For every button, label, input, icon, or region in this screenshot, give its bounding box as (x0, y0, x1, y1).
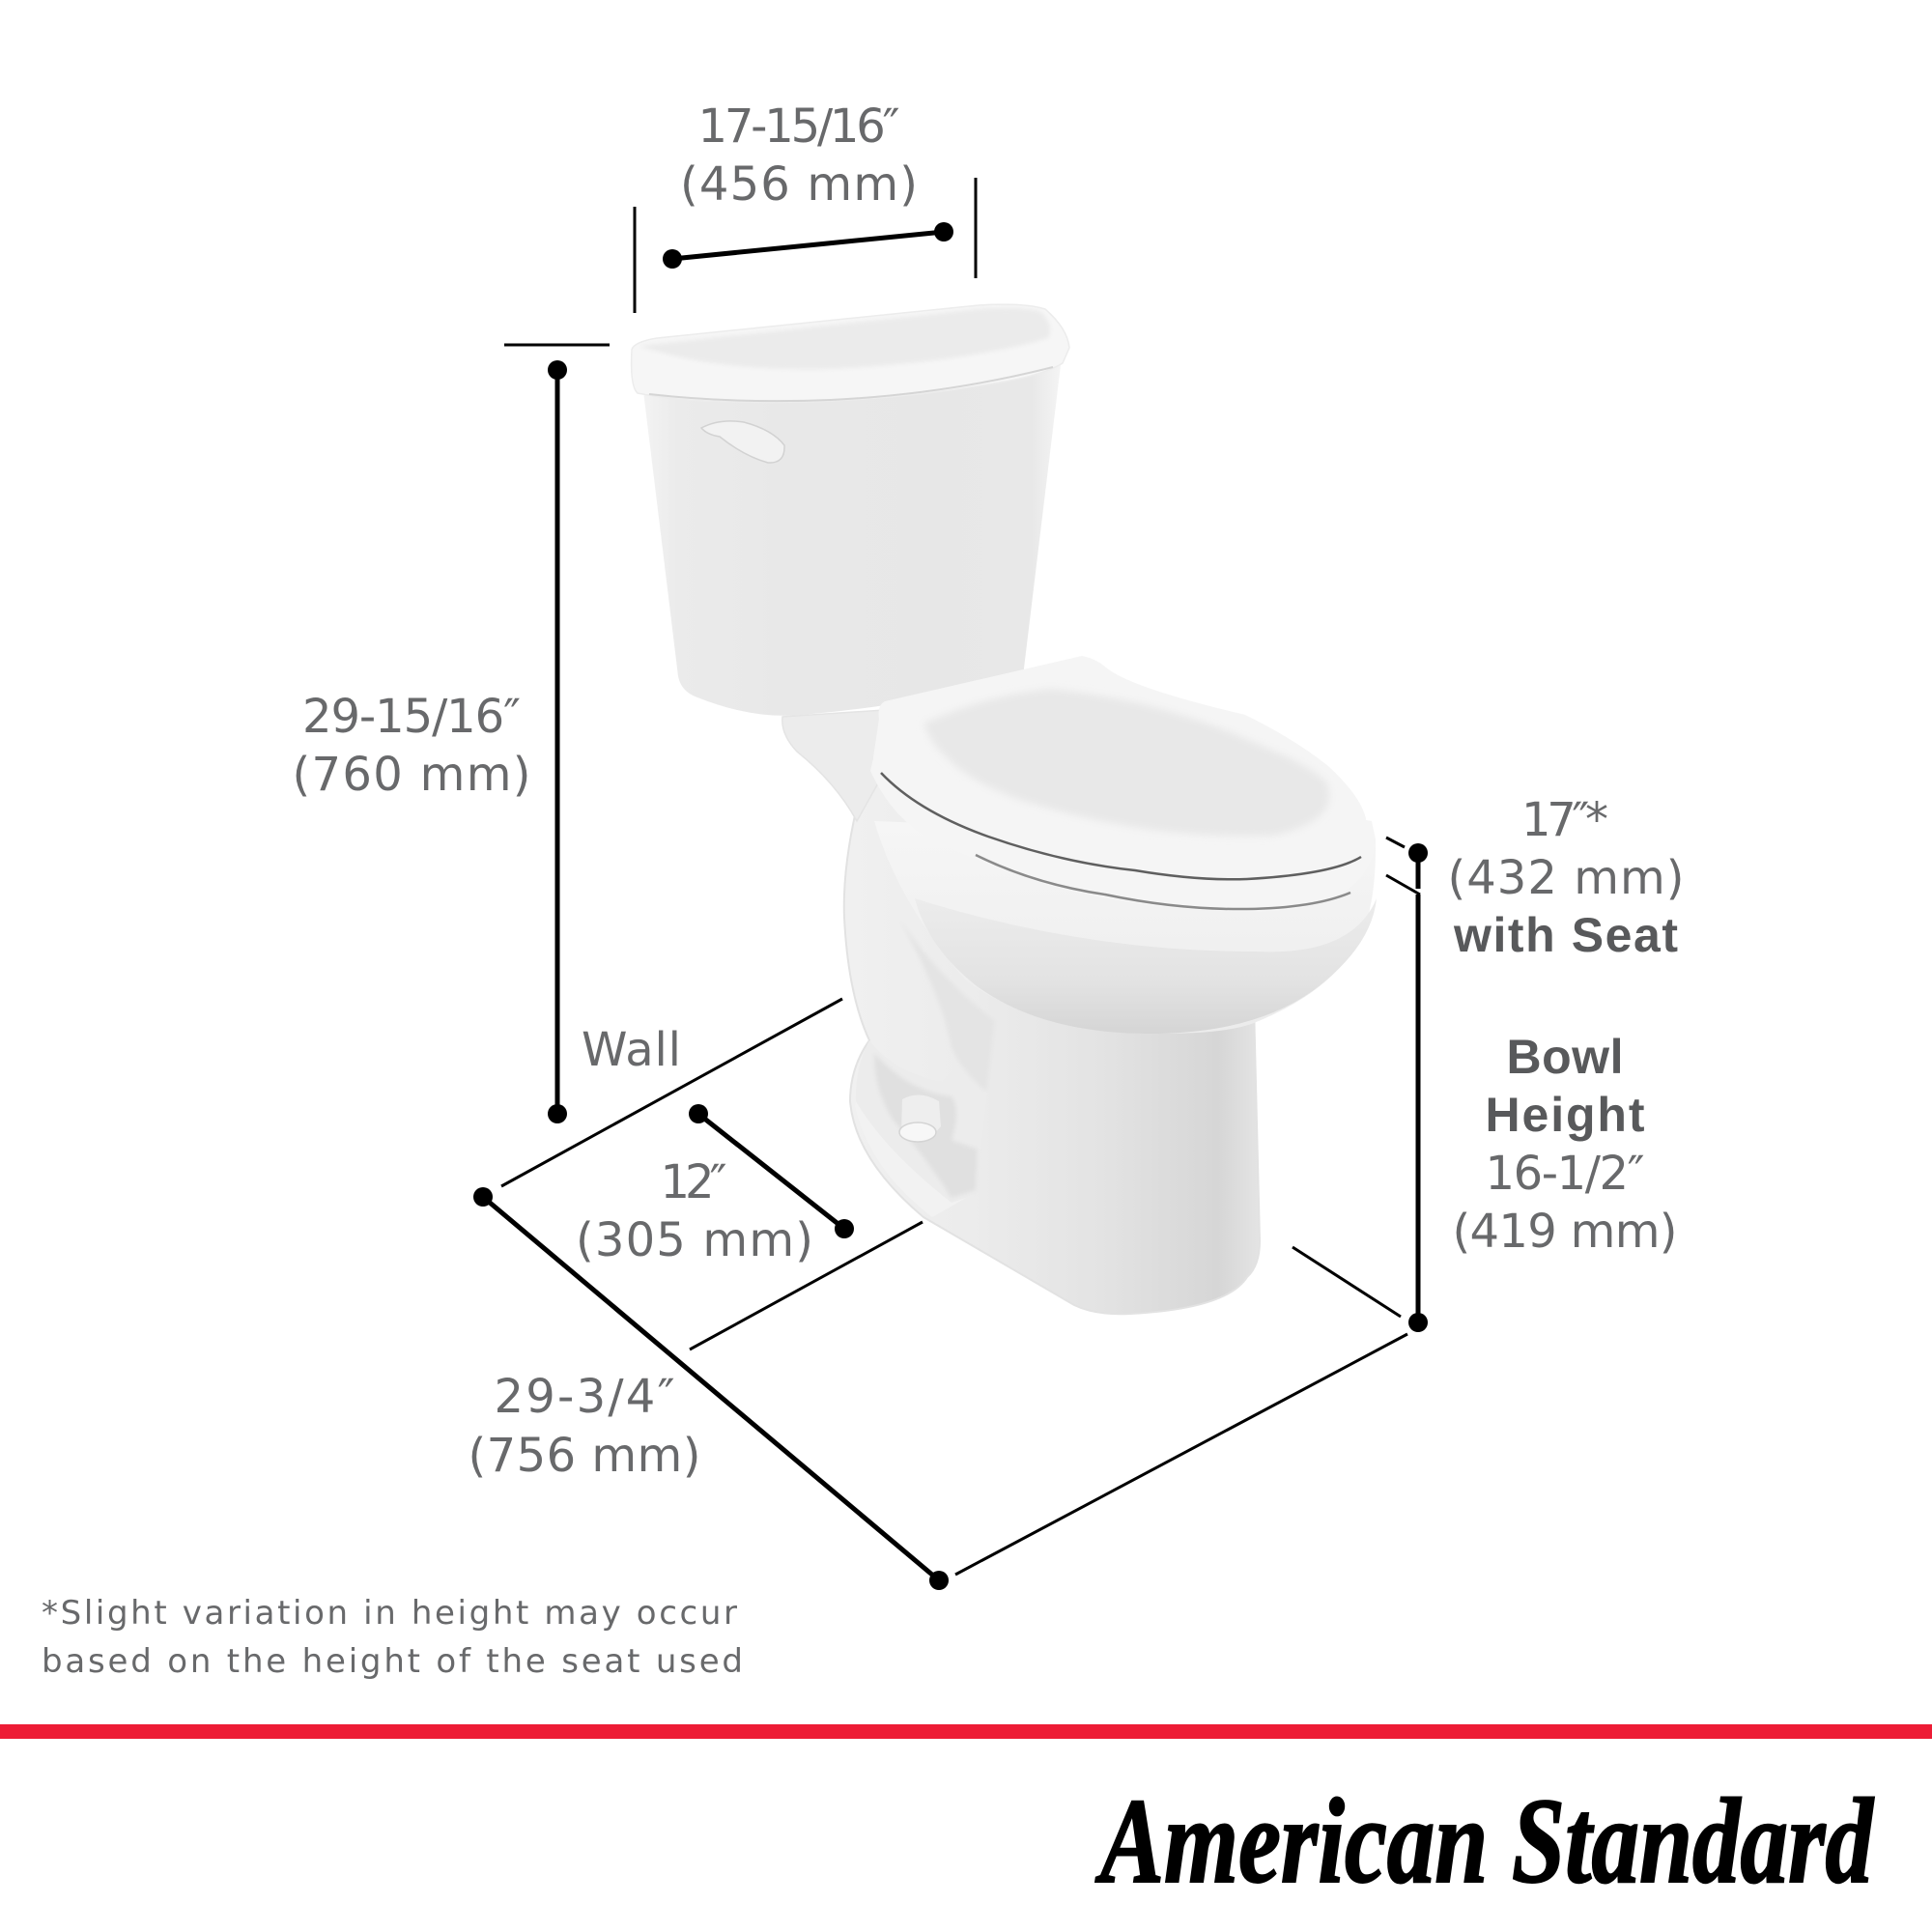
tank width label: (456 mm) (680, 157, 918, 212)
base width line (955, 1334, 1407, 1575)
height with seat label: with Seat (1453, 908, 1678, 962)
footnote: *Slight variation in height may occur (42, 1594, 737, 1633)
rough-in reference line (690, 1222, 923, 1350)
overall depth label: 29-3/4″ (495, 1370, 674, 1424)
rough-in dimension (689, 1104, 854, 1238)
bowl height dimension (1293, 838, 1428, 1332)
overall depth dimension (473, 1187, 949, 1590)
overall depth label: (756 mm) (468, 1429, 701, 1483)
height with seat label: (432 mm) (1447, 851, 1685, 905)
bowl height label: 16-1/2″ (1486, 1147, 1644, 1201)
footnote: based on the height of the seat used (42, 1642, 743, 1681)
wall reference line (501, 999, 842, 1186)
red divider bar (0, 1724, 1932, 1739)
bowl height label: (419 mm) (1453, 1205, 1677, 1259)
bowl height label: Bowl (1507, 1030, 1623, 1084)
tank connector (782, 710, 884, 821)
height with seat label: 17″* (1521, 793, 1608, 847)
toilet illustration (632, 304, 1377, 1314)
bowl height label: Height (1486, 1088, 1645, 1142)
rough-in label: 12″ (661, 1155, 726, 1209)
tank width label: 17-15/16″ (697, 99, 900, 154)
tank body (643, 365, 1061, 716)
wall label: Wall (582, 1023, 681, 1077)
seat ring (870, 734, 1376, 912)
bowl rim (874, 821, 1376, 1034)
overall height label: (760 mm) (292, 748, 531, 802)
tank lid (632, 304, 1069, 403)
overall height dimension (504, 345, 610, 1123)
seat gap lines (881, 773, 1361, 909)
bowl base and pedestal (844, 763, 1260, 1314)
seat lid (873, 656, 1367, 879)
overall height label: 29-15/16″ (302, 690, 521, 744)
flush handle (701, 421, 784, 463)
tank width dimension (635, 178, 976, 313)
drain bolt cap (899, 1094, 941, 1142)
rough-in label: (305 mm) (576, 1213, 813, 1267)
bowl underside (915, 898, 1377, 1034)
